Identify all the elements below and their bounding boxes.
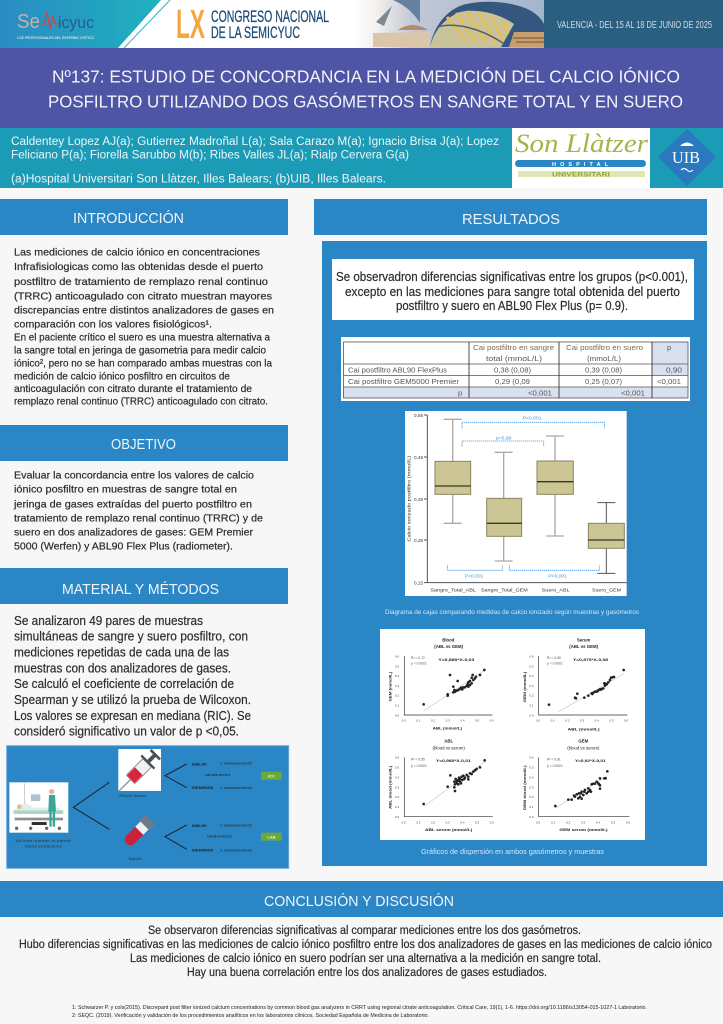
- text block: introduction: (TRRC) anticoagulado con citrato muestran mayores: [14, 290, 272, 302]
- scatter: blood ABL vs GEM: ABL (mmol/L): [433, 725, 463, 730]
- callout: key result: [332, 259, 694, 320]
- heading: Resultados: [314, 199, 707, 235]
- scatter: GEM blood vs serum: Y=0,92*X-0,01: [575, 758, 607, 763]
- results table: total (mmoL/L): [486, 354, 543, 363]
- label: total paired extractions: [16, 839, 71, 849]
- scatter: ABL blood vs serum: 0.2: [431, 820, 435, 824]
- text block: methods: Los valores se expresan en mediana (RIC). Se: [14, 708, 251, 723]
- badge: ICV: ICV: [268, 773, 275, 778]
- arrows: analyzers whole blood: [165, 764, 187, 788]
- scatter: blood ABL vs GEM: 0.1: [416, 719, 421, 723]
- heading: Introducción: [0, 199, 288, 235]
- date block: [544, 0, 723, 48]
- results table: [341, 337, 690, 401]
- heading: Objetivo: OBJETIVO: [111, 437, 176, 453]
- results table: 0,90: [666, 366, 682, 374]
- LX mark: LX: [176, 1, 205, 47]
- icon: patient in bed with nurse: [9, 782, 68, 833]
- panel: results: [322, 241, 707, 866]
- scatter: blood ABL vs GEM: 0.2: [431, 719, 435, 723]
- scatter: serum ABL vs GEM: 0.4: [529, 674, 534, 678]
- box: Sangre_Total_GEM: [487, 452, 522, 561]
- text block: methods: simultáneas de sangre y suero posfiltro, con: [14, 628, 248, 644]
- scatter: blood ABL vs GEM: 0.6: [490, 719, 494, 723]
- scatter: blood ABL vs GEM: 0.2: [395, 694, 399, 698]
- text block: introduction: Las mediciones de calcio iónico en concentraciones: [14, 246, 260, 258]
- scatter: ABL blood vs serum: 0.1: [416, 820, 421, 824]
- scatter: ABL blood vs serum: ABL blood (mmol/L): [388, 765, 393, 809]
- scatter: serum ABL vs GEM: 0.1: [551, 719, 555, 723]
- results table: <0,001: [528, 388, 552, 398]
- scatter: GEM blood vs serum: 0.5: [611, 820, 615, 824]
- authors: Feliciano P(a); Fiorella Sarubbo M(b); Ribes Valles JL(a); Rialp Cervera G(a): [11, 150, 409, 162]
- scatter: GEM blood vs serum: GEM blood (mmol/L): [522, 765, 527, 810]
- labels: serum analyzers: ABL90: [192, 824, 207, 828]
- heading: Material y Métodos: [0, 568, 288, 604]
- scatter: serum ABL vs GEM: 0.6: [624, 719, 628, 723]
- scatter: GEM blood vs serum: R² = 0.81: [547, 757, 561, 761]
- scatter: ABL blood vs serum: Y=0,980*X-0,01: [436, 758, 472, 763]
- scatter: serum ABL vs GEM: 0.5: [609, 719, 614, 723]
- text block: methods: [14, 613, 251, 738]
- scatter: blood ABL vs GEM: 0.1: [395, 704, 399, 708]
- label: whole blood: Whole blood: [118, 793, 146, 798]
- scatter: GEM blood vs serum: 0.6: [529, 756, 534, 760]
- results table: Cai postfiltro en sangre: [473, 343, 554, 352]
- scatter: GEM blood vs serum: 0.1: [529, 805, 534, 809]
- scatter: blood ABL vs GEM: Y=0,880*X-0,03: [438, 657, 475, 662]
- labels: serum analyzers: GEM5000: [192, 848, 213, 852]
- text block: methods: consideró significativo un valor de p <0,05.: [14, 724, 239, 738]
- text block: objective: Evaluar la concordancia entre los valores de calcio: [14, 470, 254, 482]
- y axis labels: 0,15: [414, 580, 423, 585]
- x axis labels: [430, 588, 621, 594]
- scatter: blood ABL vs GEM: 0.4: [395, 674, 399, 678]
- text block: conclusions: Hay una buena correlación entre los dos analizadores de gases estudiados.: [187, 967, 547, 979]
- y axis labels: 0,25: [414, 538, 423, 543]
- results table: 0,25 (0,07): [585, 377, 623, 386]
- scatter: GEM blood vs serum: 0.4: [529, 775, 534, 779]
- scatter: blood ABL vs GEM: 0.3: [446, 719, 450, 723]
- results table: <0,001: [657, 377, 681, 386]
- labels: serum analyzers: 1 measurement: [220, 823, 252, 827]
- results table: 0,38 (0,08): [494, 366, 532, 374]
- text block: methods: muestras con dos analizadores de gases.: [14, 660, 231, 676]
- scatter: blood ABL vs GEM: 0.6: [395, 654, 399, 658]
- text block: objective: suero en dos analizadores de gases: GEM Premier: [14, 526, 254, 538]
- scatter: GEM blood vs serum: GEM: [578, 738, 589, 743]
- text block: introduction: remplazo renal continuo (TRRC) anticoagulado con citrato.: [14, 396, 268, 408]
- scatter: serum ABL vs GEM: R² = 0.89: [547, 656, 561, 660]
- heading: Objetivo: [0, 425, 288, 461]
- header left gradient with diagonal: [0, 0, 161, 48]
- scatter: ABL blood vs serum: 0.6: [490, 820, 494, 824]
- text block: introduction: [14, 246, 274, 408]
- scatter: blood ABL vs GEM: 0.0: [395, 713, 399, 717]
- scatter: serum ABL vs GEM: 0.3: [580, 719, 584, 723]
- label: total paired extractions: blood extractions: [25, 845, 62, 849]
- results table: <0,001: [621, 388, 645, 398]
- text block: objective: [13, 470, 263, 552]
- authors band: [0, 128, 723, 188]
- logo: UIB: [658, 129, 716, 186]
- labels: whole blood analyzers: ABL90: [192, 762, 207, 766]
- x axis labels: Sangre_Total_GEM: [481, 588, 528, 594]
- scatter: serum ABL vs GEM: Y=0,870*X-0,08: [573, 657, 609, 662]
- Semicyuc logo: [17, 11, 95, 40]
- significance labels: P<0,001: [548, 573, 567, 579]
- Semicyuc logo: Se: [17, 11, 40, 33]
- scatter: serum ABL vs GEM: (ABL vs GEM): [569, 644, 599, 649]
- title band: Nº137: ESTUDIO DE CONCORDANCIA EN LA MEDICIÓN DEL CALCIO IÓNICO: [52, 66, 680, 86]
- scatter: serum ABL vs GEM: 0.1: [529, 704, 534, 708]
- scatter: ABL blood vs serum: (blood vs serum): [433, 745, 465, 750]
- text block: conclusions: Las mediciones de calcio iónico en suero podrían ser una alternativa a la medición en sangre total.: [130, 953, 601, 965]
- text block: introduction: comparación con los valores fisiológicos¹.: [14, 318, 212, 330]
- scatter: ABL blood vs serum: ABL serum (mmol/L): [425, 827, 473, 832]
- box: Sangre_Total_ABL: [435, 419, 471, 523]
- references: [72, 1005, 647, 1019]
- scatter: blood ABL vs GEM: p < 0.0001: [411, 661, 427, 665]
- scatter: GEM blood vs serum: 0.3: [581, 820, 585, 824]
- scatter: ABL blood vs serum: 0.5: [475, 820, 479, 824]
- scatter: GEM blood vs serum: GEM serum (mmol/L): [559, 827, 608, 832]
- labels: whole blood analyzers: [192, 761, 252, 790]
- conference header banner: [0, 0, 723, 48]
- scatter: ABL blood vs serum: 0.2: [395, 795, 399, 799]
- logo: Son Llatzer: Son Llàtzer: [515, 129, 649, 158]
- results table: Cai postfiltro ABL90 FlexPlus: [348, 366, 447, 374]
- icon: syringe: [112, 747, 163, 798]
- scatter: serum ABL vs GEM: ABL (mmol/L): [568, 727, 600, 732]
- text block: methods: Spearman y se utilizó la prueba de Wilcoxon.: [14, 692, 251, 707]
- text block: introduction: iónico², pero no se han comparado ambas muestras con la: [14, 358, 272, 370]
- logo: Son Llatzer: [512, 128, 650, 188]
- scatter: ABL blood vs serum: 0.0: [402, 820, 406, 824]
- text block: introduction: En el paciente crítico el suero es una muestra alternativa a: [14, 332, 270, 344]
- labels: whole blood analyzers: randomized: [205, 773, 230, 777]
- heading: Material y Métodos: MATERIAL Y MÉTODOS: [62, 581, 219, 598]
- badge: LAB: [261, 833, 282, 841]
- significance labels: P<0,001: [465, 573, 484, 579]
- results table: p: [458, 388, 462, 398]
- badge: ICV: [261, 772, 282, 780]
- scatter: ABL blood vs serum: 0.3: [395, 785, 399, 789]
- congress name: CONGRESO NACIONAL: [211, 8, 329, 26]
- text block: methods: mediciones repetidas de cada una de las: [14, 644, 229, 660]
- scatter: GEM blood vs serum: 0.0: [529, 815, 534, 819]
- venue photo: [355, 0, 545, 48]
- scatter: serum ABL vs GEM: 0.4: [595, 719, 599, 723]
- significance labels: [465, 416, 567, 579]
- y axis labels: 0,45: [414, 455, 423, 460]
- caption: box plot: Diagrama de cajas comparando medidas de calcio ionizado según muestras y gasómetros: [385, 610, 639, 616]
- text block: conclusions: [19, 925, 712, 979]
- callout: key result: postfiltro y suero en ABL90 Flex Plus (p= 0.9).: [396, 299, 628, 313]
- labels: serum analyzers: 1 measurement: [220, 848, 252, 852]
- scatter: GEM blood vs serum: (blood vs serum): [567, 745, 600, 750]
- authors: Caldentey Lopez AJ(a); Gutierrez Madroñal L(a); Sala Carazo M(a); Ignacio Brisa J(a); Lopez: [11, 136, 499, 148]
- scatter: GEM blood vs serum: 0.2: [566, 820, 570, 824]
- callout: key result: Se observadron diferencias significativas entre los grupos (p<0.001),: [336, 270, 688, 284]
- label: total paired extractions: 45 total number of paired: [16, 839, 71, 843]
- text block: introduction: discrepancias entre distintos analizadores de gases en: [14, 304, 274, 316]
- y axis labels: 0,35: [414, 497, 423, 502]
- scatter: serum ABL vs GEM: p < 0.0001: [547, 661, 563, 665]
- results table: Cai postfiltro GEM5000 Premier: [348, 377, 460, 386]
- scatter: GEM blood vs serum: 0.0: [536, 820, 540, 824]
- x axis labels: Sangre_Total_ABL: [430, 588, 476, 594]
- scatter: blood ABL vs GEM: [388, 638, 494, 730]
- x axis labels: Suero_GEM: [592, 588, 621, 594]
- box plot chart: [405, 411, 627, 596]
- labels: whole blood analyzers: GEM5000: [192, 786, 213, 790]
- scatter: blood ABL vs GEM: Blood: [442, 638, 455, 643]
- y axis labels: 0,55: [414, 413, 423, 418]
- box: Suero_GEM: [588, 503, 624, 573]
- results table: 0,39 (0,08): [585, 366, 623, 374]
- y axis labels: Calcio ionizado postfiltro (mmol/L): [407, 455, 412, 542]
- significance labels: P<0,001: [523, 416, 542, 422]
- results table: p: [667, 343, 671, 352]
- text block: objective: iónico posfiltro en muestras de sangre total en: [14, 484, 237, 496]
- scatter: serum ABL vs GEM: 0.0: [529, 713, 534, 717]
- scatter: GEM blood vs serum: 0.6: [626, 820, 630, 824]
- text block: introduction: postfiltro de tratamiento de remplazo renal continuo: [14, 276, 268, 288]
- text block: objective: 5000 (Werfen) y ABL90 Flex Plus (radiometer).: [14, 540, 233, 552]
- results table: 0,29 (0,09: [495, 377, 530, 386]
- scatter: GEM blood vs serum: 0.5: [529, 766, 534, 770]
- Semicyuc logo: LOS PROFESIONALES DEL ENFERMO CRÍTICO: [17, 36, 95, 40]
- affiliations: (a)Hospital Universitari Son Llàtzer, Illes Balears; (b)UIB, Illes Balears.: [11, 174, 386, 186]
- heading: Resultados: RESULTADOS: [462, 212, 560, 228]
- scatter: GEM blood vs serum: 0.2: [529, 795, 534, 799]
- congress name: [211, 8, 329, 42]
- logo: Son Llatzer: UNIVERSITARI: [552, 172, 610, 178]
- scatter: ABL blood vs serum: 0.1: [395, 805, 399, 809]
- labels: serum analyzers: randomized: [207, 835, 232, 839]
- scatter: ABL blood vs serum: 0.4: [395, 775, 399, 779]
- scatter: GEM blood vs serum: 0.1: [551, 820, 555, 824]
- heading: Conclusión y Discusión: [0, 881, 723, 917]
- icon: blood tube: [122, 815, 155, 848]
- scatter: ABL blood vs serum: 0.3: [446, 820, 450, 824]
- scatter: blood ABL vs GEM: 0.3: [395, 684, 399, 688]
- scatter: blood ABL vs GEM: R² = 0.72: [411, 656, 425, 660]
- text block: introduction: la sangre total en jeringa de gasometria para medir calcio: [14, 344, 266, 356]
- scatter: serum ABL vs GEM: 0.6: [529, 654, 534, 658]
- labels: serum analyzers: [192, 823, 252, 852]
- scatter: blood ABL vs GEM: 0.5: [475, 719, 479, 723]
- callout: key result: excepto en las mediciones para sangre total obtenida del puerto: [345, 285, 680, 299]
- scatter: GEM blood vs serum: 0.4: [596, 820, 600, 824]
- scatter: GEM blood vs serum: [522, 738, 630, 832]
- significance brackets: [448, 422, 604, 570]
- labels: whole blood analyzers: 1 measurement: [220, 761, 252, 765]
- text block: objective: tratamiento de remplazo renal continuo (TRRC) y de: [14, 512, 263, 524]
- heading: Conclusión y Discusión: CONCLUSIÓN Y DISCUSIÓN: [264, 893, 454, 910]
- text block: objective: jeringa de gases extraídas del puerto postfiltro en: [13, 498, 252, 510]
- badge: LAB: LAB: [267, 834, 276, 839]
- scatter: blood ABL vs GEM: 0.5: [395, 664, 399, 668]
- scatter: blood ABL vs GEM: 0.0: [402, 719, 406, 723]
- scatter: ABL blood vs serum: 0.0: [395, 815, 399, 819]
- congress name: DE LA SEMICYUC: [211, 24, 300, 42]
- scatter: serum ABL vs GEM: 0.2: [529, 694, 534, 698]
- label: serum: Serum: [129, 857, 142, 861]
- text block: introduction: Infrafisiologicas como las obtenidas desde el puerto: [14, 261, 263, 273]
- arrows: analyzers serum: [165, 825, 187, 849]
- y axis labels: [407, 413, 423, 585]
- title band: POSFILTRO UTILIZANDO DOS GASÓMETROS EN SANGRE TOTAL Y EN SUERO: [48, 90, 683, 112]
- box: Suero_ABL: [537, 436, 573, 536]
- scatter: ABL blood vs serum: p < 0.0001: [411, 764, 427, 768]
- references: 2: SEQC. (2019). Verificación y validación de los procedimientos analíticos en los laboratorios clínicos. Sociedad Española de Medicina de Laboratorio.: [72, 1013, 429, 1019]
- authors: [11, 136, 499, 162]
- scatter: serum ABL vs GEM: 0.2: [565, 719, 570, 723]
- scatter: ABL blood vs serum: 0.5: [395, 766, 399, 770]
- logo: Son Llatzer: HOSPITAL: [552, 162, 609, 168]
- scatter: serum ABL vs GEM: 0.3: [529, 684, 534, 688]
- text block: methods: Se calculó el coeficiente de correlación de: [14, 676, 234, 691]
- scatter: ABL blood vs serum: 0.4: [460, 820, 465, 824]
- text block: conclusions: Se observaron diferencias significativas al comparar mediciones entre los dos gasómetros.: [148, 925, 581, 937]
- references: 1: Schwarzer P. y cols(2015). Discrepant post filter ionized calcium concentrations by common blood gas analyzers in CRRT using regional citrate anticoagulation. Critical Care, 19(1), 1-6. https://doi.org/10.1186/s13054-015-1027-1 Laboratorio.: [72, 1005, 647, 1011]
- heading: Introducción: INTRODUCCIÓN: [73, 210, 184, 227]
- logo: UIB: UIB: [672, 148, 700, 167]
- labels: whole blood analyzers: 1 measurement: [220, 786, 252, 790]
- scatter plots: [380, 629, 645, 840]
- scatter: ABL blood vs serum: [388, 738, 494, 832]
- x axis labels: Suero_ABL: [542, 588, 570, 594]
- results table: Cai postfiltro en suero: [566, 343, 643, 352]
- scatter: GEM blood vs serum: 0.3: [529, 785, 534, 789]
- scatter: blood ABL vs GEM: 0.4: [460, 719, 465, 723]
- scatter: blood ABL vs GEM: GEM (mmol/L): [388, 671, 393, 702]
- scatter: serum ABL vs GEM: 0.0: [536, 719, 540, 723]
- title band: [0, 48, 723, 128]
- scatter: serum ABL vs GEM: [522, 638, 628, 732]
- scatter: blood ABL vs GEM: (ABL vs GEM): [434, 644, 464, 649]
- scatter: GEM blood vs serum: p < 0.0001: [547, 764, 563, 768]
- scatter: ABL blood vs serum: 0.6: [395, 756, 399, 760]
- scatter: serum ABL vs GEM: Serum: [577, 638, 591, 643]
- scatter: serum ABL vs GEM: 0.5: [529, 664, 534, 668]
- text block: introduction: anticoagulación con citrato durante el tratamiento de: [14, 383, 252, 395]
- caption: scatter plots: Gráficos de dispersión en ambos gasómetros y muestras: [421, 847, 604, 856]
- study design diagram: [7, 746, 289, 868]
- text block: methods: Se analizaron 49 pares de muestras: [14, 613, 203, 628]
- significance labels: p=0,99: [496, 436, 512, 442]
- arrows: sample split: [73, 782, 109, 829]
- results table: (mmoL/L): [587, 354, 622, 363]
- Semicyuc logo: icyuc: [58, 13, 94, 32]
- scatter: ABL blood vs serum: R² = 0.85: [411, 757, 425, 761]
- text block: introduction: medición de calcio iónico posfiltro en circuitos de: [14, 370, 230, 382]
- scatter: ABL blood vs serum: ABL: [444, 738, 453, 743]
- scatter: serum ABL vs GEM: GEM (mmol/L): [522, 671, 527, 702]
